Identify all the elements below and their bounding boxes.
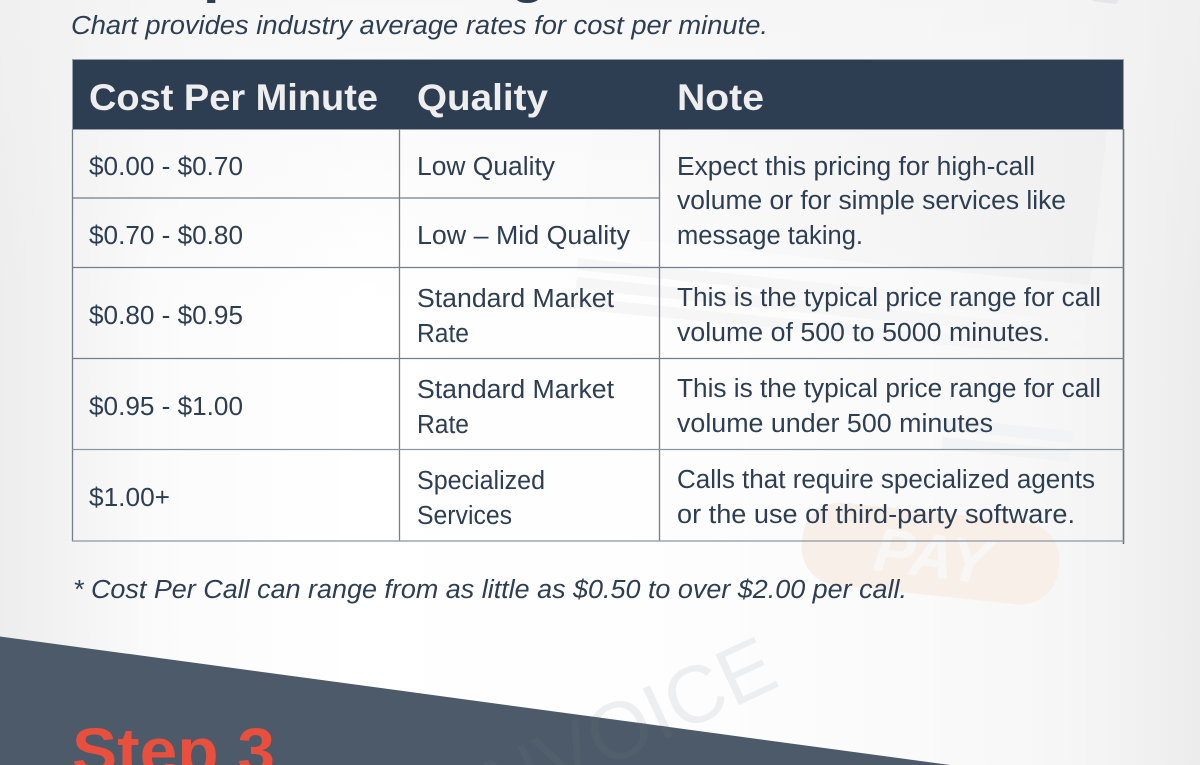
row: $1.00+: Services	[417, 502, 512, 530]
merged note: high-call volume: volume or for simple services like	[677, 187, 1066, 215]
row: $0.80 - $0.95: Rate	[417, 320, 469, 348]
row: $0.95 - $1.00: $0.95 - $1.00	[89, 393, 243, 421]
watermark: pay button: PAY	[870, 515, 999, 599]
row: $0.80 - $0.95	[89, 284, 1101, 348]
row: $0.95 - $1.00	[89, 375, 1101, 439]
row: $0.80 - $0.95: volume of 500 to 5000 minutes.	[677, 319, 1050, 347]
merged note: high-call volume: Expect this pricing for high-call	[677, 153, 1035, 181]
row: $0.70 - $0.80	[89, 222, 630, 250]
row: $0.95 - $1.00: This is the typical price range for call	[677, 375, 1101, 403]
row: $1.00+: Calls that require specialized agents	[677, 466, 1095, 494]
row: $0.00 - $0.70: $0.00 - $0.70	[89, 153, 243, 181]
table header	[72, 60, 1124, 130]
row: $0.80 - $0.95: Standard Market	[417, 285, 614, 313]
row: $0.00 - $0.70	[89, 153, 555, 181]
merged note: high-call volume	[677, 153, 1066, 250]
table header: Cost Per Minute	[89, 77, 378, 118]
subtitle: Chart provides industry average rates for cost per minute.	[71, 12, 768, 40]
row: $0.00 - $0.70: Low Quality	[417, 153, 555, 181]
row: $0.95 - $1.00: volume under 500 minutes	[677, 410, 993, 438]
row: $0.80 - $0.95: This is the typical price range for call	[677, 284, 1101, 312]
row: $0.95 - $1.00: Standard Market	[417, 376, 614, 404]
watermark: pay button	[798, 499, 1063, 608]
table grid lines	[72, 129, 1124, 544]
row: $0.80 - $0.95: $0.80 - $0.95	[89, 302, 243, 330]
table header: Note	[677, 77, 764, 118]
watermark: invoice document	[574, 0, 1118, 462]
row: $0.95 - $1.00: Rate	[417, 411, 469, 439]
merged note: high-call volume: message taking.	[677, 222, 863, 250]
footnote: * Cost Per Call can range from as little as $0.50 to over $2.00 per call.	[73, 576, 907, 604]
row: $1.00+	[89, 466, 1095, 530]
dark slanted section	[0, 636, 950, 765]
row: $1.00+: $1.00+	[89, 484, 170, 512]
row: $0.70 - $0.80: Low – Mid Quality	[417, 222, 630, 250]
pricing table	[72, 60, 1124, 544]
table header: Quality	[417, 77, 548, 118]
row: $1.00+: or the use of third-party software.	[677, 501, 1075, 529]
row: $0.70 - $0.80: $0.70 - $0.80	[89, 222, 243, 250]
row: $1.00+: Specialized	[417, 467, 545, 495]
